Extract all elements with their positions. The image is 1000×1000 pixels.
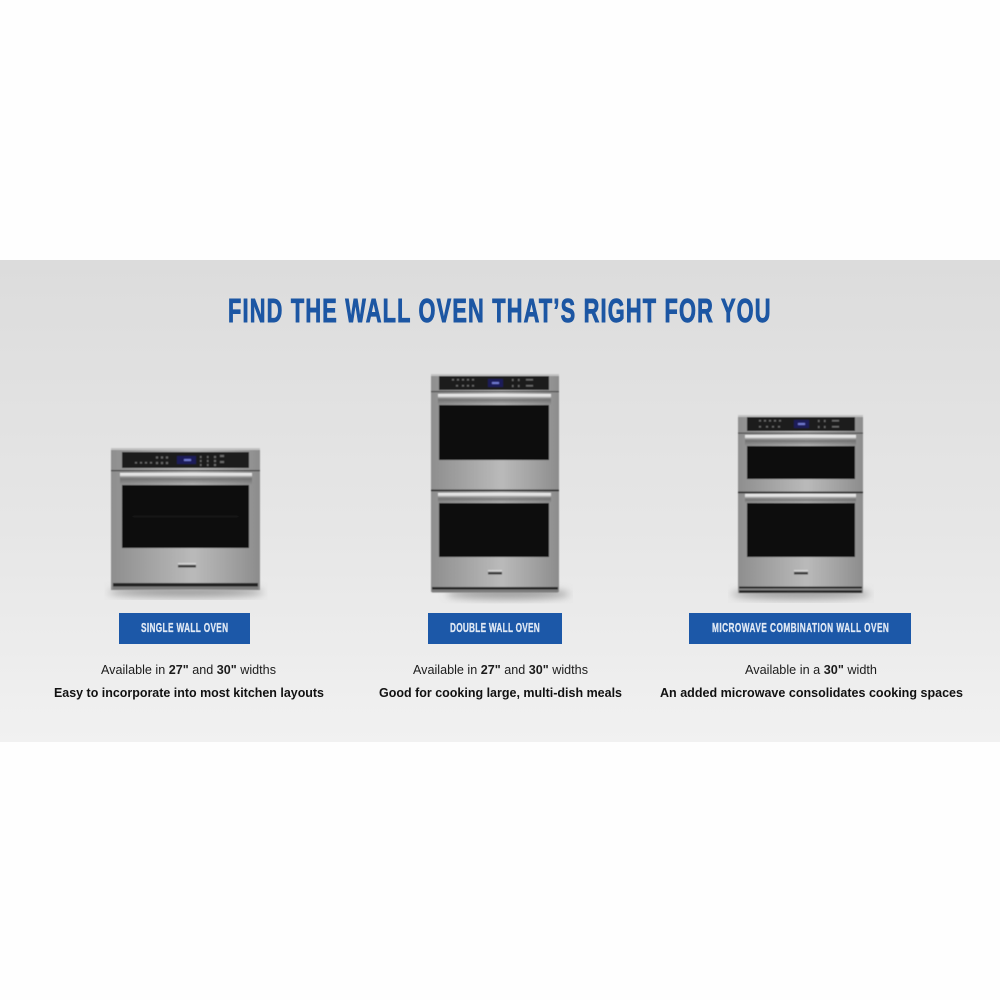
button: microwave combination wall oven (689, 613, 911, 644)
text: double width availability: Available in 27" and 30" widths (413, 662, 588, 677)
text: combination width availability: Available in a 30" width (745, 662, 877, 677)
panel: grey band (0, 260, 1000, 742)
button: single wall oven: SINGLE WALL OVEN (141, 621, 228, 636)
oven: microwave combination wall oven (731, 415, 871, 599)
button: double wall oven (428, 613, 562, 644)
button: microwave combination wall oven: MICROWAVE COMBINATION WALL OVEN (712, 621, 889, 636)
text: double benefit: Good for cooking large, multi-dish meals (379, 685, 622, 700)
text: combination benefit: An added microwave consolidates cooking spaces (660, 685, 963, 700)
oven: double wall oven (431, 374, 570, 599)
button: single wall oven (119, 613, 250, 644)
text: single width availability: Available in 27" and 30" widths (101, 662, 276, 677)
column: microwave combination wall oven (660, 415, 963, 700)
column: double wall oven (379, 374, 622, 700)
oven: single wall oven (108, 448, 264, 597)
button: double wall oven: DOUBLE WALL OVEN (450, 621, 540, 636)
column: single wall oven (54, 448, 324, 700)
title: FIND THE WALL OVEN THAT’S RIGHT FOR YOU (228, 292, 771, 329)
text: single benefit: Easy to incorporate into most kitchen layouts (54, 685, 324, 700)
